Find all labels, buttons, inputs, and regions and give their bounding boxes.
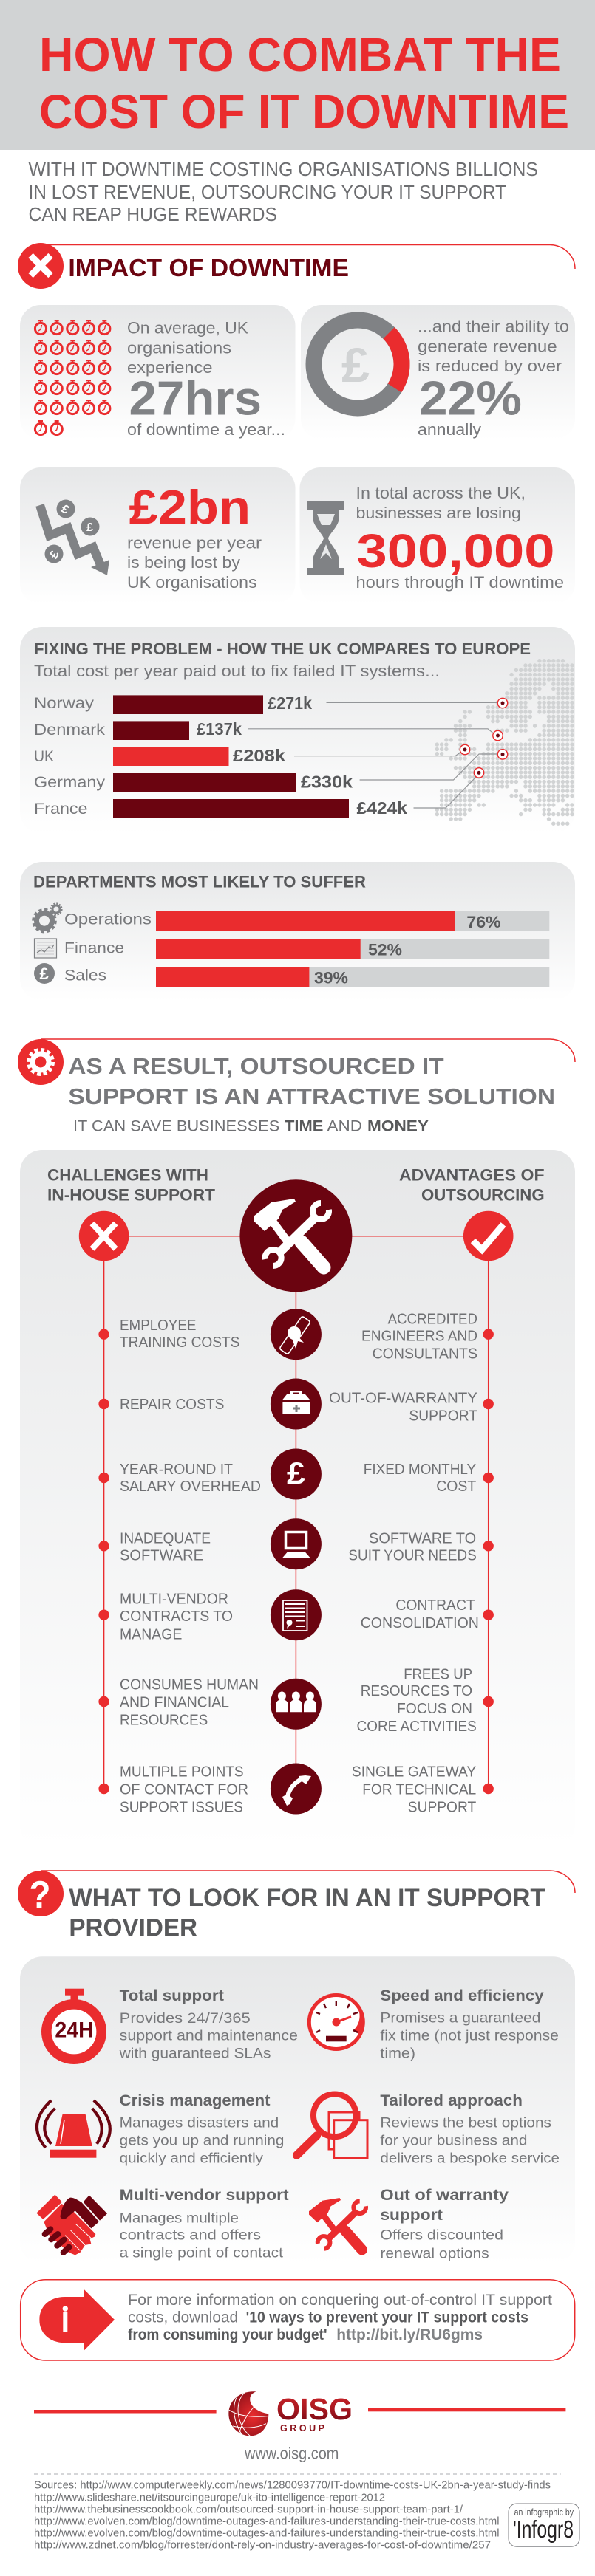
text: left: REPAIR COSTS <box>120 1397 224 1413</box>
row: contact <box>120 1764 476 1815</box>
icon: 24H stopwatch <box>47 1989 101 2059</box>
text: right <box>361 1311 477 1362</box>
panel: departments most likely to suffer <box>20 862 575 1001</box>
icon: hammer and wrench <box>239 1179 352 1292</box>
text: Crisis management <box>120 2092 271 2109</box>
text: Promises a guaranteed <box>380 2010 541 2026</box>
row: resources <box>120 1666 477 1735</box>
text: left: INADEQUATE <box>120 1530 211 1546</box>
icon: falling arrow and coins <box>40 499 109 575</box>
text <box>380 2187 509 2262</box>
section heading: outsourced IT support: AS A RESULT, OUTSOURCED IT <box>68 1053 444 1079</box>
icon: telephone <box>271 1764 322 1814</box>
icon: diploma <box>271 1309 322 1360</box>
icon: 24H stopwatch: 24H <box>55 2018 94 2043</box>
intro text: IN LOST REVENUE, OUTSOURCING YOUR IT SUPPORT <box>28 182 506 203</box>
sources: http://www.zdnet.com/blog/forrester/dont-rely-on-industry-averages-for-cost-of-downtime/257 <box>34 2540 491 2552</box>
text: right <box>352 1764 476 1815</box>
text: average downtime: 27hrs <box>129 371 262 425</box>
sources: http://www.thebusinesscookbook.com/outsourced-support-in-house-support-team-part-1/ <box>34 2504 463 2516</box>
heading: DEPARTMENTS MOST LIKELY TO SUFFER <box>33 873 366 891</box>
callout text: from consuming your budget' <box>128 2326 327 2343</box>
icon: tick <box>463 1211 513 1261</box>
text <box>120 2187 289 2261</box>
text: right: ENGINEERS AND <box>361 1328 477 1344</box>
text: Tailored approach <box>380 2092 523 2109</box>
section heading: what to look for <box>18 1871 575 1942</box>
icon: pound coin <box>34 963 55 984</box>
text: left <box>120 1676 259 1728</box>
intro text: CAN REAP HUGE REWARDS <box>28 205 277 225</box>
text <box>380 1987 559 2062</box>
subheading <box>73 1118 429 1135</box>
bar: Denmark <box>34 719 242 740</box>
row: Finance <box>34 939 549 959</box>
text: right: SUPPORT <box>409 1408 477 1424</box>
map markers <box>460 698 508 778</box>
icon: speedometer <box>309 1996 364 2049</box>
callout text: For more information on conquering out-of-control IT support <box>128 2292 552 2309</box>
text: average downtime: On average, UK <box>127 319 248 337</box>
subheading: IT CAN SAVE BUSINESSES <box>73 1118 279 1135</box>
column heading: challenges: IN-HOUSE SUPPORT <box>47 1185 216 1204</box>
sources <box>34 2474 561 2552</box>
column heading: advantages <box>399 1165 545 1204</box>
OISG logo: OISG <box>276 2392 353 2426</box>
icon: question mark <box>18 1871 64 1916</box>
text: a single point of contact <box>120 2245 284 2261</box>
text: 300,000: hours through IT downtime <box>356 573 564 592</box>
row: Sales: 39% <box>314 969 348 987</box>
text: 2bn: UK organisations <box>127 573 257 592</box>
text: revenue reduction: annually <box>418 420 482 439</box>
item: total support <box>47 1987 298 2062</box>
panel: provider checklist <box>20 1956 575 2264</box>
text: right: CONTRACT <box>395 1597 475 1614</box>
text: revenue reduction: ...and their ability to <box>418 318 569 335</box>
website address: www.oisg.com <box>244 2444 339 2462</box>
infogr8 badge: 'Infogr8 <box>513 2515 574 2543</box>
panel: 22% revenue reduction <box>301 305 575 439</box>
text: left <box>120 1318 239 1351</box>
section heading: impact of downtime: IMPACT OF DOWNTIME <box>68 254 349 281</box>
panel: 2bn revenue lost <box>20 467 296 604</box>
text: 300,000: businesses are losing <box>356 504 521 522</box>
callout: more information <box>21 2280 575 2360</box>
section heading: what to look for: PROVIDER <box>69 1914 197 1942</box>
icon: red tools <box>309 2198 366 2250</box>
header band <box>0 0 595 150</box>
text: 300,000: 300,000 <box>356 524 554 578</box>
text <box>120 2092 284 2166</box>
panel: 27 hours of downtime <box>20 305 296 439</box>
icon: computer <box>271 1518 322 1569</box>
text: Out of warranty <box>380 2187 509 2204</box>
text: gets you up and running <box>120 2132 284 2148</box>
text: Reviews the best options <box>380 2115 551 2131</box>
text: delivers a bespoke service <box>380 2150 560 2166</box>
title: COST OF IT DOWNTIME <box>39 85 569 138</box>
row: training <box>120 1309 477 1362</box>
text: right <box>356 1666 477 1735</box>
icon: falling arrow and coins: £ <box>59 502 71 517</box>
section heading: outsourced IT support: SUPPORT IS AN ATTRACTIVE SOLUTION <box>68 1083 555 1109</box>
callout text: http://bit.ly/RU6gms <box>336 2326 483 2343</box>
text: right: SINGLE GATEWAY <box>352 1764 476 1781</box>
icon: chart <box>34 939 56 958</box>
icon: revenue donut: £ <box>341 338 370 392</box>
row: software <box>120 1518 477 1569</box>
text: left: TRAINING COSTS <box>120 1335 239 1351</box>
icon: information arrow <box>39 2289 115 2351</box>
text: right: SUPPORT <box>408 1799 476 1815</box>
bar: Germany: £330k <box>301 772 353 791</box>
text: left: MANAGE <box>120 1626 182 1642</box>
icon: pound <box>271 1449 322 1499</box>
icon: gears <box>33 904 62 932</box>
text: support and maintenance <box>120 2027 298 2044</box>
column heading: challenges <box>47 1165 216 1204</box>
text: left: RESOURCES <box>120 1712 208 1728</box>
text: average downtime: organisations <box>127 338 231 357</box>
text: right: CONSULTANTS <box>373 1346 477 1362</box>
icon: magnifier and documents <box>296 2094 367 2158</box>
callout text: costs, download <box>128 2309 238 2326</box>
text: Provides 24/7/365 <box>120 2010 251 2027</box>
text: right: RESOURCES TO <box>361 1683 472 1699</box>
text: average downtime <box>127 319 285 439</box>
text: right <box>364 1462 476 1495</box>
text: left: SUPPORT ISSUES <box>120 1799 243 1815</box>
text: left <box>120 1591 233 1642</box>
icon: people <box>271 1679 322 1730</box>
footer divider lines <box>34 2408 565 2414</box>
text: quickly and efficiently <box>120 2150 263 2166</box>
sources: http://www.evolven.com/blog/downtime-outages-and-failures-understanding-their-true-costs.html <box>34 2516 500 2528</box>
connector lines <box>104 1236 489 1789</box>
text: left: AND FINANCIAL <box>120 1695 229 1711</box>
bar: Norway: Norway <box>34 694 94 712</box>
text: contracts and offers <box>120 2227 261 2244</box>
infogr8 badge: an infographic by <box>514 2507 574 2518</box>
title <box>39 28 569 138</box>
bar: UK <box>34 746 285 766</box>
text: average downtime: of downtime a year... <box>127 420 285 439</box>
text: 2bn: £2bn <box>129 480 251 534</box>
text: right: FOCUS ON <box>397 1701 472 1717</box>
text: 2bn: is being lost by <box>127 553 241 572</box>
text: right: CORE ACTIVITIES <box>356 1719 477 1735</box>
column heading: challenges: CHALLENGES WITH <box>47 1165 208 1184</box>
item: tailored approach <box>296 2092 560 2166</box>
text: right <box>329 1390 477 1424</box>
text: left: SALARY OVERHEAD <box>120 1479 261 1495</box>
title: HOW TO COMBAT THE <box>39 28 561 81</box>
item: crisis management <box>37 2092 285 2166</box>
section heading: what to look for: WHAT TO LOOK FOR IN AN IT SUPPORT <box>69 1884 545 1912</box>
text: left <box>120 1462 261 1495</box>
icon: revenue donut <box>313 321 402 408</box>
row: Sales: Sales <box>64 967 106 984</box>
bar: France <box>34 798 407 818</box>
text: left: CONSUMES HUMAN <box>120 1676 259 1693</box>
row: salary <box>120 1449 476 1499</box>
row: Sales <box>34 963 549 987</box>
panel: in-house vs outsourcing <box>20 1150 575 1848</box>
sources: http://www.slideshare.net/itsourcingeurope/uk-ito-intelligence-report-2012 <box>34 2493 385 2504</box>
callout text: '10 ways to prevent your IT support costs <box>246 2309 528 2326</box>
bar: France: £424k <box>356 798 407 818</box>
text: left: OF CONTACT FOR <box>120 1781 248 1798</box>
text: with guaranteed SLAs <box>119 2046 271 2062</box>
icon: pound coin: £ <box>40 965 49 983</box>
bar: UK: UK <box>34 747 55 765</box>
text: right: FIXED MONTHLY <box>364 1462 476 1478</box>
text: 300,000 <box>356 484 564 592</box>
text: right: SUIT YOUR NEEDS <box>348 1547 477 1563</box>
item: speed and efficiency <box>309 1987 559 2062</box>
row: repair <box>120 1378 477 1430</box>
item: multi-vendor support <box>36 2187 289 2261</box>
row: Operations: Operations <box>64 911 152 928</box>
text: left: SOFTWARE <box>120 1547 203 1563</box>
text: left: MULTIPLE POINTS <box>120 1764 244 1781</box>
leader lines <box>248 702 498 808</box>
text: right: SOFTWARE TO <box>369 1530 476 1546</box>
OISG logo: GROUP <box>280 2423 324 2433</box>
heading <box>34 640 531 680</box>
text <box>380 2092 560 2166</box>
text: fix time (not just response <box>380 2027 559 2044</box>
text: right <box>348 1530 477 1563</box>
row: Operations: 76% <box>466 913 501 931</box>
intro text: WITH IT DOWNTIME COSTING ORGANISATIONS BILLIONS <box>28 160 538 180</box>
text: right <box>361 1597 479 1631</box>
icon: question mark: ? <box>30 1874 50 1916</box>
subheading: AND <box>327 1118 362 1135</box>
text: renewal options <box>380 2246 489 2262</box>
panel: how the UK compares to Europe <box>20 627 575 834</box>
text: Total support <box>120 1987 224 2004</box>
text: right: COST <box>436 1479 476 1495</box>
text: revenue reduction: 22% <box>419 371 522 425</box>
text: left: YEAR-ROUND IT <box>120 1462 233 1478</box>
subheading: MONEY <box>367 1118 429 1135</box>
sources: Sources: http://www.computerweekly.com/news/1280093770/IT-downtime-costs-UK-2bn-a-year-study-finds <box>34 2479 551 2491</box>
icon: hourglass <box>307 501 344 575</box>
icon: toolbox <box>271 1378 322 1430</box>
heading: FIXING THE PROBLEM - HOW THE UK COMPARES TO EUROPE <box>34 640 531 658</box>
text: revenue reduction: is reduced by over <box>418 357 562 375</box>
row: Finance: Finance <box>64 940 124 957</box>
text <box>119 1987 298 2062</box>
row: contracts <box>120 1589 479 1642</box>
sources: http://www.evolven.com/blog/downtime-outages-and-failures-understanding-their-true-costs.html <box>34 2528 500 2540</box>
callout text <box>128 2292 552 2343</box>
timeline dots <box>98 1329 494 1794</box>
panel: 300,000 hours <box>300 467 575 604</box>
text: Manages disasters and <box>120 2115 279 2131</box>
dot map of Europe <box>437 661 572 823</box>
text: left: MULTI-VENDOR <box>120 1591 228 1607</box>
section heading: outsourced IT support <box>18 1039 575 1135</box>
OISG logo <box>228 2391 353 2436</box>
text: left: CONTRACTS TO <box>120 1609 233 1625</box>
icon: handshake <box>36 2195 107 2255</box>
row: Finance: 52% <box>368 940 402 959</box>
section heading: impact of downtime <box>18 243 575 289</box>
icon: gear <box>18 1039 64 1085</box>
text: revenue reduction <box>418 318 569 439</box>
text: right: FREES UP <box>404 1666 472 1682</box>
subheading: TIME <box>285 1118 323 1135</box>
text: for your business and <box>380 2132 528 2148</box>
bar: Denmark: £137k <box>197 719 242 739</box>
bar: Germany <box>34 772 353 792</box>
icon: stopwatches <box>35 320 110 435</box>
text: revenue reduction: generate revenue <box>418 337 557 356</box>
text: left <box>120 1530 211 1563</box>
column heading: advantages: ADVANTAGES OF <box>399 1165 545 1184</box>
bar: Norway: £271k <box>268 693 312 713</box>
text: Offers discounted <box>380 2227 503 2244</box>
text: left <box>120 1764 248 1815</box>
text: time) <box>380 2046 415 2062</box>
bar: Denmark: Denmark <box>34 721 105 739</box>
bar: Norway <box>34 693 312 714</box>
icon: cross <box>79 1211 129 1261</box>
item: out of warranty support <box>309 2187 509 2262</box>
bar: France: France <box>34 800 87 818</box>
icon: pound: £ <box>287 1456 305 1490</box>
icon: siren <box>37 2100 110 2158</box>
bar: Germany: Germany <box>34 773 105 791</box>
icon: falling arrow and coins: £ <box>86 521 93 534</box>
column heading: advantages: OUTSOURCING <box>421 1185 545 1204</box>
row: Operations <box>33 904 549 932</box>
text: right: CONSOLIDATION <box>361 1615 479 1631</box>
text: 300,000: In total across the UK, <box>356 484 526 502</box>
intro text <box>28 160 538 225</box>
icon: falling arrow and coins: £ <box>47 549 62 561</box>
bar: UK: £208k <box>233 746 285 765</box>
text: support <box>380 2207 443 2224</box>
text: Multi-vendor support <box>120 2187 289 2204</box>
text: right: FOR TECHNICAL <box>362 1781 476 1798</box>
icon: contract <box>271 1589 322 1640</box>
text: right: ACCREDITED <box>388 1311 477 1327</box>
icon: cross <box>18 243 64 289</box>
heading: Total cost per year paid out to fix failed IT systems... <box>34 662 440 680</box>
text: average downtime: experience <box>127 358 213 377</box>
text: Manages multiple <box>120 2210 239 2226</box>
text: 2bn: revenue per year <box>127 533 262 552</box>
infogr8 badge <box>509 2504 579 2546</box>
globe mark <box>228 2391 268 2436</box>
text: right: OUT-OF-WARRANTY <box>329 1390 477 1406</box>
text: Speed and efficiency <box>380 1987 544 2004</box>
text: 2bn <box>127 480 262 592</box>
text: left: EMPLOYEE <box>120 1318 196 1334</box>
